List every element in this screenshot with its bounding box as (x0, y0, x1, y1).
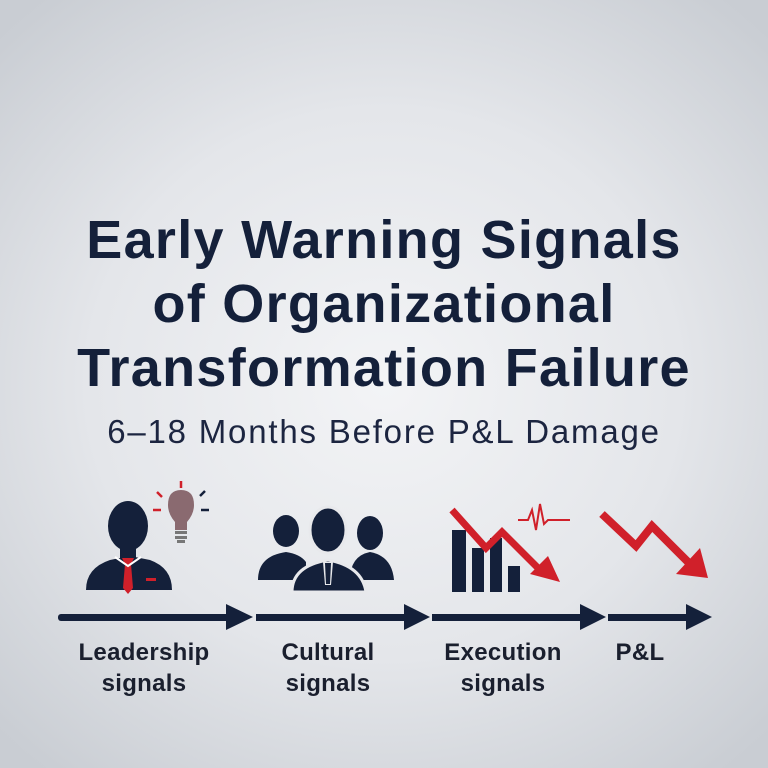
arrow 3 (432, 604, 606, 630)
label: cultural signals: Cultural (281, 639, 375, 666)
label: execution signals (444, 639, 562, 697)
label: execution signals: Execution (444, 639, 562, 666)
title: Transformation Failure (77, 338, 691, 398)
label: leadership signals: Leadership (78, 639, 210, 666)
subtitle: 6–18 Months Before P&L Damage (107, 413, 661, 450)
label: P&L: P&L (616, 639, 664, 666)
label: cultural signals (281, 639, 375, 697)
icon: leader with lightbulb (86, 481, 209, 594)
title: Early Warning Signals (86, 210, 682, 270)
title (77, 210, 691, 398)
icon: P&L downward arrow (602, 514, 708, 578)
label: execution signals: signals (461, 670, 545, 697)
label: leadership signals: signals (102, 670, 186, 697)
arrow 4 (608, 604, 712, 630)
icon: team of people (258, 507, 394, 592)
icon: bar chart with down arrow (452, 504, 570, 592)
arrow 1 (58, 604, 253, 630)
title: of Organizational (152, 274, 616, 334)
arrow 2 (256, 604, 430, 630)
label: leadership signals (78, 639, 210, 697)
label: cultural signals: signals (286, 670, 370, 697)
